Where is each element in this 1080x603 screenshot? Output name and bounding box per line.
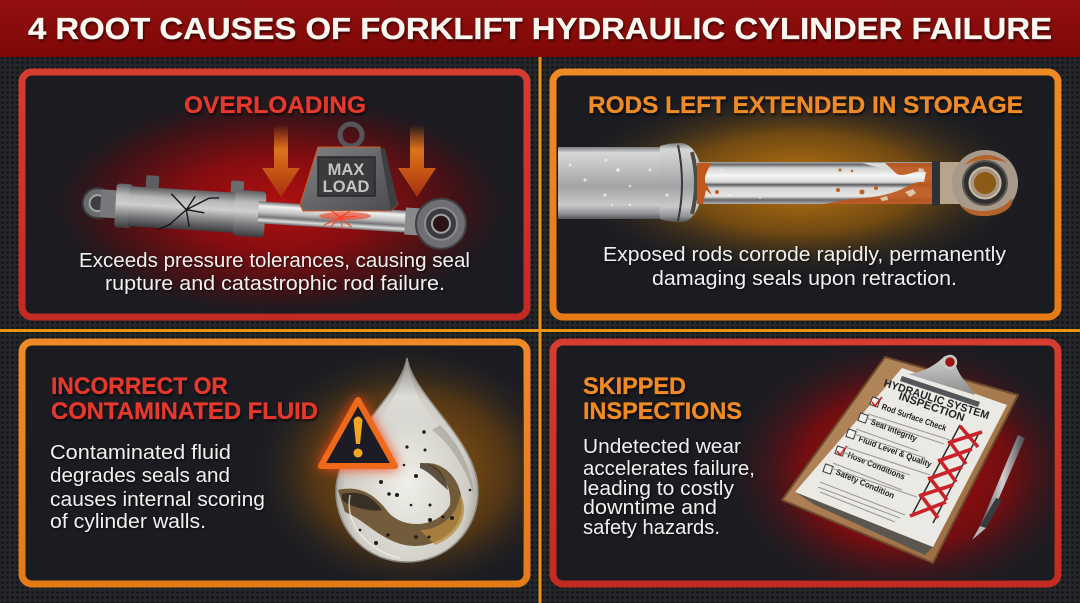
text: inspections description: safety hazards. bbox=[583, 517, 720, 539]
text: inspections description bbox=[583, 436, 755, 539]
clipboard clip bbox=[900, 356, 980, 407]
panel: skipped inspections bbox=[550, 338, 1062, 588]
icon: contaminated oil drop bbox=[336, 358, 478, 562]
panel: rods left extended bbox=[553, 72, 1058, 317]
checkboxes bbox=[823, 397, 880, 474]
header banner bbox=[0, 0, 1080, 57]
illustration: corroded rod bbox=[558, 143, 1018, 222]
checklist text: Safety Condition bbox=[834, 467, 896, 500]
icon: max load weight bbox=[300, 124, 398, 211]
text: inspections description: accelerates failure, bbox=[583, 458, 755, 480]
heading: skipped inspections bbox=[583, 373, 742, 425]
heading: overloading: OVERLOADING bbox=[184, 92, 366, 119]
text: rods description bbox=[603, 244, 1006, 290]
heading: incorrect or contaminated fluid: CONTAMINATED FLUID bbox=[51, 398, 318, 425]
icon: max load weight: LOAD bbox=[323, 178, 369, 196]
icon: pen bbox=[972, 435, 1025, 540]
form lines bbox=[818, 414, 950, 522]
panel: overloading bbox=[22, 72, 527, 323]
text: overloading description: Exceeds pressure tolerances, causing seal bbox=[79, 250, 470, 272]
text: fluid description: degrades seals and bbox=[50, 465, 230, 487]
heading: rods left extended: RODS LEFT EXTENDED IN STORAGE bbox=[588, 92, 1023, 119]
red X marks column bbox=[910, 425, 982, 523]
checklist text: Rod Surface Check bbox=[880, 401, 948, 433]
icon: max load weight: MAX bbox=[328, 161, 364, 179]
illustration: cracked cylinder bbox=[81, 171, 468, 250]
heading: incorrect or contaminated fluid bbox=[51, 373, 318, 425]
checklist text: Hose Conditions bbox=[846, 450, 907, 482]
text: fluid description: causes internal scoring bbox=[50, 489, 265, 511]
checklist text: Seal Integrity bbox=[869, 417, 919, 444]
heading: skipped inspections: SKIPPED bbox=[583, 373, 686, 400]
text: inspections description: leading to costly bbox=[583, 478, 734, 500]
heading: incorrect or contaminated fluid: INCORRECT OR bbox=[51, 373, 228, 400]
panel: contaminated fluid bbox=[18, 338, 530, 588]
text: overloading description: rupture and catastrophic rod failure. bbox=[105, 273, 445, 295]
text: rods description: damaging seals upon retraction. bbox=[652, 268, 957, 290]
text: inspections description: Undetected wear bbox=[583, 436, 741, 458]
title: 4 ROOT CAUSES OF FORKLIFT HYDRAULIC CYLINDER FAILURE bbox=[28, 12, 1052, 46]
text: fluid description bbox=[50, 442, 265, 533]
icon: warning triangle bbox=[321, 400, 395, 466]
text: fluid description: Contaminated fluid bbox=[50, 442, 231, 464]
text: rods description: Exposed rods corrode rapidly, permanently bbox=[603, 244, 1006, 266]
text: overloading description bbox=[79, 250, 470, 295]
checklist text: HYDRAULIC SYSTEM bbox=[882, 377, 991, 422]
checklist text bbox=[834, 377, 991, 500]
icon: inspection clipboard bbox=[782, 356, 1018, 563]
checklist text: INSPECTION bbox=[897, 390, 966, 424]
icon: left down arrow bbox=[262, 125, 300, 197]
checklist text: Fluid Level & Quality bbox=[857, 433, 933, 469]
text: fluid description: of cylinder walls. bbox=[50, 511, 206, 533]
icon: right down arrow bbox=[398, 125, 436, 197]
heading: skipped inspections: INSPECTIONS bbox=[583, 398, 742, 425]
text: inspections description: downtime and bbox=[583, 497, 717, 519]
